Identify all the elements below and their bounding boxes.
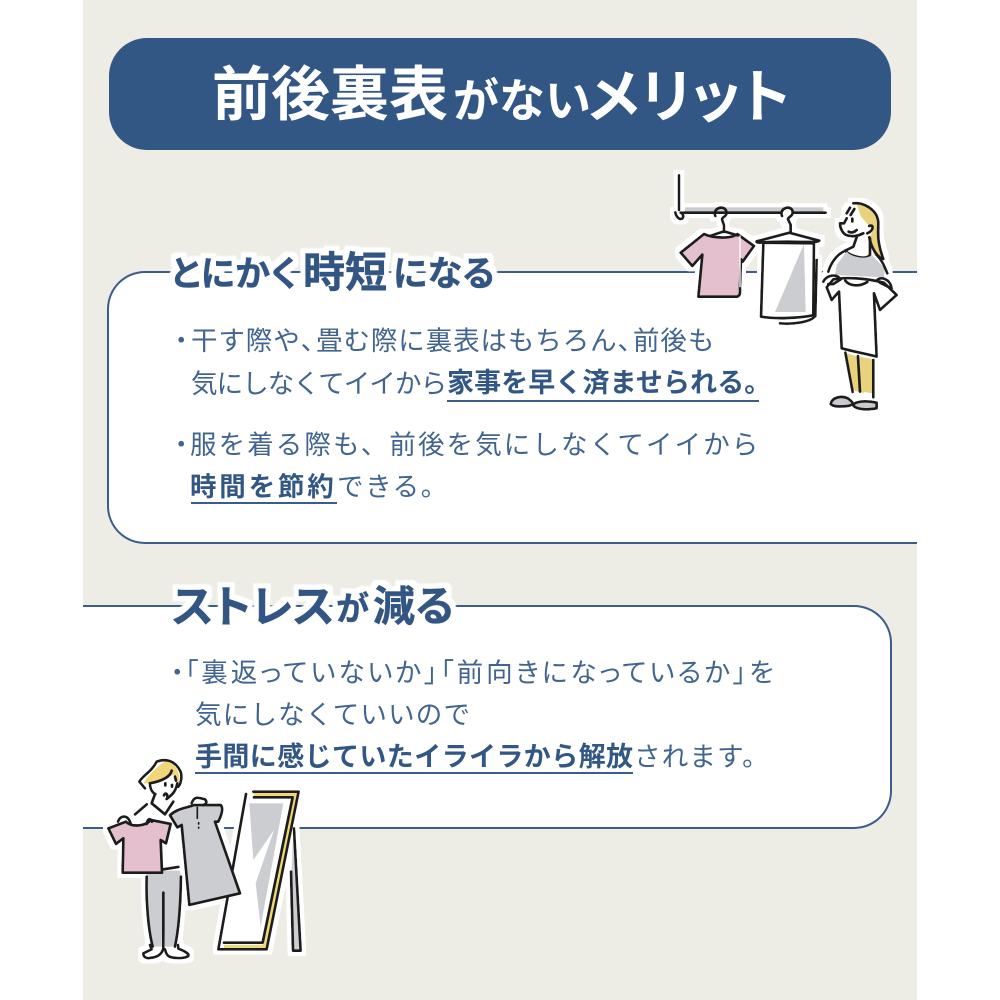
text block: time saving bullet 1: 気にしなくてイイから [191,369,446,399]
panel: time saving [107,271,917,544]
title [212,62,791,130]
heading: time saving: とにかく [171,255,297,294]
title banner [109,38,891,150]
heading: less stress: ストレス [172,583,335,632]
heading: time saving [169,246,498,296]
text block: less stress bullet: されます。 [634,742,770,772]
heading: time saving: になる [393,255,495,294]
title: 前後裏表 [212,62,448,128]
text block: less stress bullet: 手間に感じていたイライラから解放 [195,742,633,772]
pink shirt on hanger [681,208,754,297]
text block: less stress bullet: ・ [164,658,190,688]
underline [191,502,337,504]
text block: less stress bullet: 気にしなくていいので [195,700,471,730]
woman [823,203,897,409]
white garment on hanger [756,208,819,324]
text block: time saving bullet 2: 時間を節約 [190,472,336,502]
text block: time saving bullet 2 [168,430,760,502]
heading: time saving: 時短 [303,249,387,296]
text block: less stress bullet: 「裏返っていないか」「前向きになっているか」を [185,658,777,688]
heading: less stress: 減る [373,583,454,630]
illustration: man holding clothes in front of mirror [108,760,301,958]
title: がない [453,75,591,127]
underline [195,772,633,774]
underline [447,400,759,402]
text block: time saving bullet 2: できる。 [337,472,449,502]
text block: time saving bullet 2: ・ [168,430,194,460]
mirror [218,792,301,951]
text block: time saving bullet 1: 家事を早く済ませられる。 [447,368,771,398]
text block: time saving bullet 1: 干す際や、畳む際に裏表はもちろん、前後も [191,326,715,356]
heading: less stress [172,580,457,632]
text block: time saving bullet 1 [168,326,771,399]
heading: less stress: が [336,590,369,627]
illustration: laundry rod, hangers and woman holding shirt [675,175,897,409]
text block: time saving bullet 2: 服を着る際も、前後を気にしなくてイイから [190,430,760,460]
title: メリット [588,65,791,130]
rod and bracket [675,175,826,219]
panel: less stress [83,605,892,829]
text block: less stress bullet [164,658,777,772]
text block: time saving bullet 1: ・ [168,326,194,356]
man [108,760,240,958]
